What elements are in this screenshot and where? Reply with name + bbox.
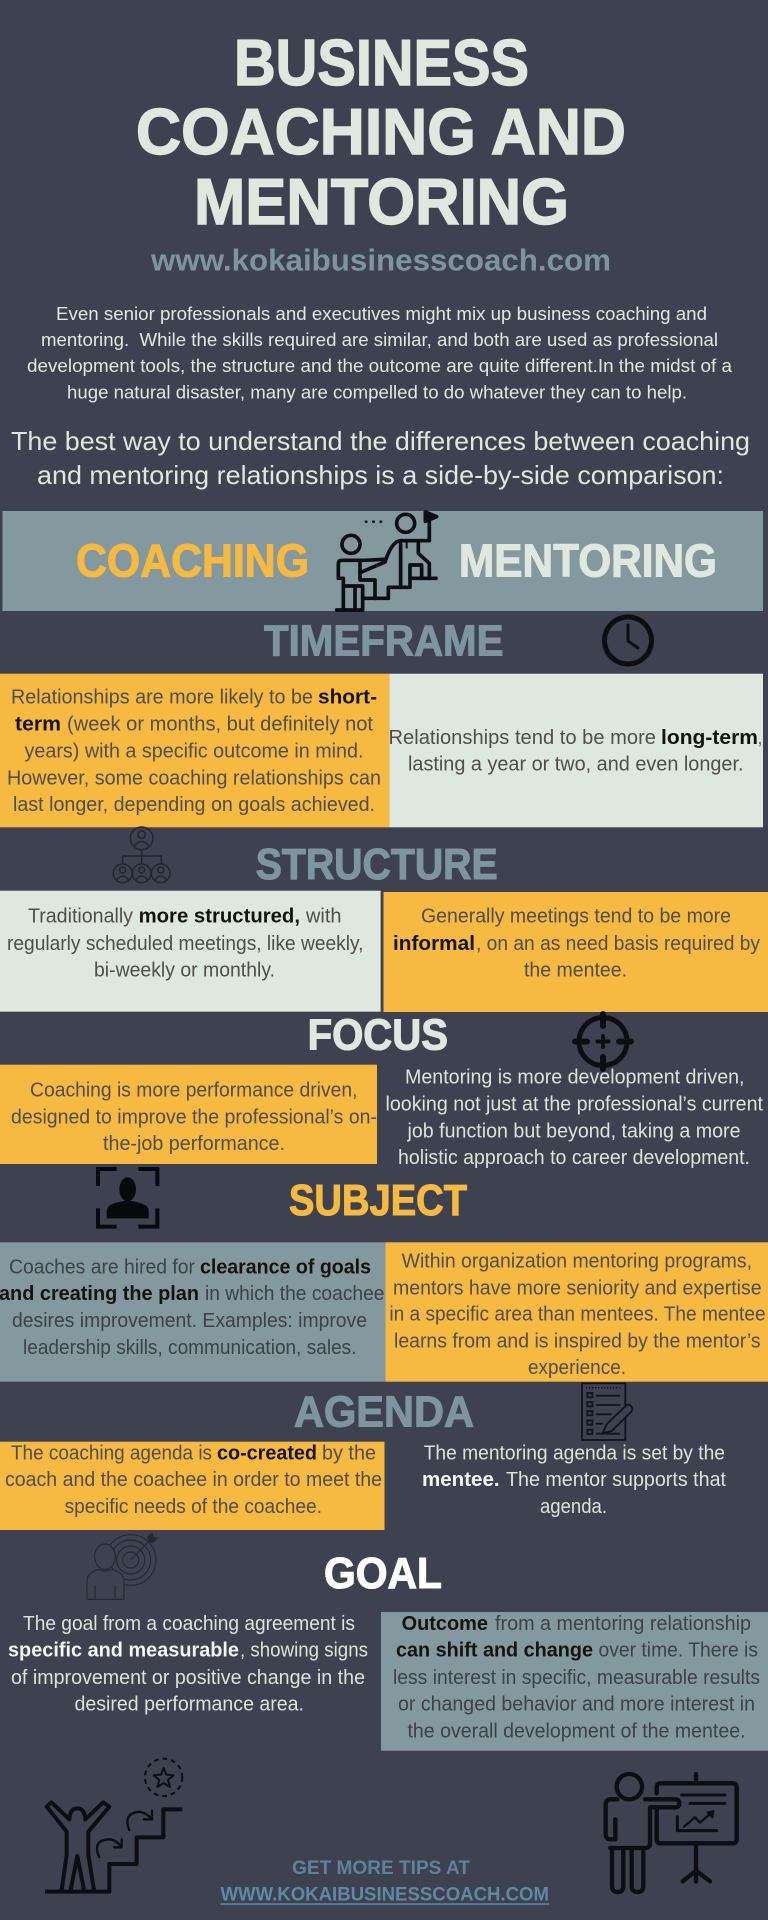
panel: subject coaching: Coaches are hired for [9,1255,195,1278]
panel: structure coaching: Traditionally [28,905,134,928]
panel: subject mentoring: experience. [528,1356,626,1379]
section heading: agenda: AGENDA [294,1388,474,1436]
panel: timeframe mentoring [388,674,763,827]
text block: agenda mentoring: The mentor supports that [506,1468,726,1491]
panel: timeframe coaching: However, some coaching relationships can [7,766,381,789]
footer call to action [220,1857,549,1906]
icon: person in focus frame [98,1169,157,1227]
icon: presenter with chart board [606,1774,737,1892]
section heading: subject: SUBJECT [289,1177,467,1225]
icon: clock [604,617,652,664]
website url: www.kokaibusinesscoach.com [150,242,611,278]
text block: focus mentoring [386,1065,763,1169]
panel: structure mentoring: informal [393,932,475,955]
panel: timeframe mentoring: lasting a year or two, and even longer. [408,753,744,776]
title: MENTORING [194,165,569,238]
panel: goal mentoring: over time. There is [598,1639,758,1662]
panel: subject coaching: clearance of goals [200,1255,371,1278]
panel: subject mentoring: Within organization mentoring programs, [402,1249,752,1272]
comparison lead-in text: The best way to understand the differences between coaching [11,426,750,456]
panel: agenda coaching: specific needs of the coachee. [65,1495,322,1518]
text block: agenda mentoring: agenda. [540,1495,607,1518]
text block: goal coaching [8,1612,368,1716]
panel: structure coaching: bi-weekly or monthly. [94,959,275,982]
text block: focus mentoring: job function but beyond, taking a more [407,1119,740,1142]
text block: focus mentoring: holistic approach to career development. [398,1146,750,1169]
title [136,26,626,238]
icon: checklist with pencil [582,1383,632,1440]
text block: goal coaching: The goal from a coaching agreement is [23,1612,355,1635]
panel: timeframe coaching: Relationships are more likely to be [11,685,313,708]
footer call to action: WWW.KOKAIBUSINESSCOACH.COM [220,1884,549,1906]
intro text block [27,304,733,402]
section heading: focus: FOCUS [308,1012,448,1060]
panel: goal mentoring: can shift and change [396,1639,593,1662]
panel: agenda coaching [0,1441,384,1530]
panel: structure coaching [0,891,381,1012]
section heading: structure: STRUCTURE [256,841,498,889]
intro text block: development tools, the structure and the outcome are quite different.In the midst of a [27,356,733,376]
panel: timeframe coaching: term [15,712,61,736]
section heading: goal: GOAL [324,1550,442,1598]
panel: structure mentoring: the mentee. [524,959,627,982]
icon: person climbing steps to a star [45,1759,182,1892]
comparison lead-in text: and mentoring relationships is a side-by-side comparison: [37,460,724,490]
panel: timeframe mentoring: , [758,726,762,749]
header bar: coaching vs mentoring [2,511,763,611]
panel: subject coaching: in which the coachee [205,1282,384,1305]
text block: goal coaching: , showing signs [240,1639,368,1662]
panel: timeframe coaching: (week or months, but definitely not [67,712,373,736]
panel: structure coaching: regularly scheduled meetings, like weekly, [7,932,364,955]
panel: timeframe mentoring: Relationships tend to be more [388,726,656,749]
title: BUSINESS [234,26,529,99]
icon: target crosshair [575,1014,631,1069]
panel: subject mentoring [386,1242,768,1382]
intro text block: huge natural disaster, many are compelled to do whatever they can to help. [67,382,687,402]
panel: agenda coaching: co-created [217,1441,317,1464]
panel: subject coaching: and creating the plan [0,1282,199,1305]
icon: person with target [87,1533,157,1599]
panel: focus coaching: Coaching is more performance driven, [30,1079,358,1102]
comparison lead-in text [11,426,750,490]
text block: goal coaching: desired performance area. [74,1693,304,1716]
panel: focus coaching [0,1065,377,1164]
panel: structure mentoring [384,892,768,1012]
panel: goal mentoring: from a mentoring relationship [495,1612,751,1635]
text block: goal coaching: specific and measurable [8,1639,239,1662]
panel: agenda coaching: coach and the coachee in order to meet the [5,1468,382,1491]
footer call to action: GET MORE TIPS AT [292,1857,470,1879]
heading: coaching: COACHING [76,534,309,586]
icon: coach helping a person up stairs [337,512,437,610]
intro text block: Even senior professionals and executives might mix up business coaching and [56,304,707,324]
panel: structure mentoring: Generally meetings tend to be more [421,905,731,928]
panel: goal mentoring: Outcome [402,1612,488,1635]
panel: agenda coaching: by the [322,1441,376,1464]
panel: structure coaching: with [305,905,342,928]
panel: goal mentoring: the overall development of the mentee. [408,1719,746,1742]
section heading: timeframe: TIMEFRAME [264,618,504,666]
panel: structure coaching: more structured, [139,905,300,928]
panel: timeframe mentoring: long-term [661,726,758,749]
panel: timeframe coaching: short- [318,685,377,708]
panel: timeframe coaching: last longer, depending on goals achieved. [13,793,375,816]
panel: timeframe coaching [0,674,390,827]
text block: agenda mentoring: The mentoring agenda is set by the [424,1441,725,1464]
panel: goal mentoring: or changed behavior and more interest in [398,1693,755,1716]
text block: focus mentoring: Mentoring is more development driven, [405,1065,744,1088]
title: COACHING AND [136,95,626,168]
panel: subject coaching: leadership skills, communication, sales. [23,1336,356,1359]
panel: focus coaching: designed to improve the professional’s on- [11,1105,377,1128]
panel: timeframe coaching: years) with a specific outcome in mind. [24,740,364,762]
intro text block: mentoring. While the skills required are similar, and both are used as professional [41,330,718,350]
panel: subject coaching: desires improvement. Examples: improve [12,1309,367,1332]
text block: focus mentoring: looking not just at the professional’s current [386,1093,763,1116]
heading: mentoring: MENTORING [459,534,717,586]
panel: agenda coaching: The coaching agenda is [11,1441,212,1464]
text block: agenda mentoring [422,1441,726,1518]
panel: goal mentoring [381,1612,768,1751]
panel: focus coaching: the-job performance. [103,1132,285,1155]
text block: goal coaching: of improvement or positive change in the [11,1666,365,1689]
panel: subject coaching [0,1242,386,1382]
text block: agenda mentoring: mentee. [422,1468,500,1491]
icon: org chart [113,827,170,883]
